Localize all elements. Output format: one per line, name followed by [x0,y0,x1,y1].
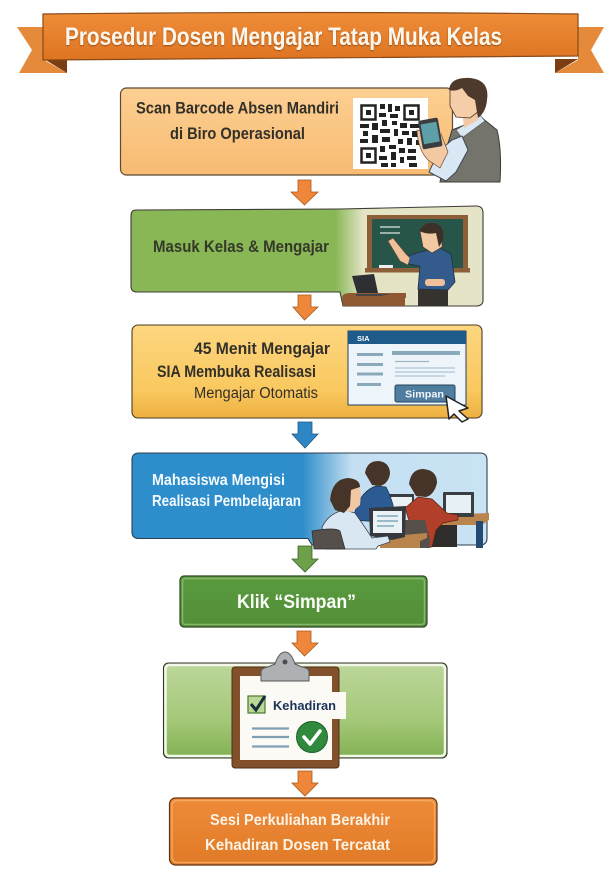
panel background [132,453,487,545]
button text: Klik “Simpan” [237,592,356,613]
right laptop [443,492,474,517]
SIA window: SIA [357,334,370,343]
panel bevel [166,665,445,756]
step 3 text [157,340,331,402]
step 7 text: Kehadiran Dosen Tercatat [205,837,390,854]
step 4 text: Mahasiswa Mengisi [152,472,285,489]
icon: clipboard [232,652,346,768]
neck [462,110,478,128]
icon: mouse cursor [446,396,468,422]
panel background [170,798,437,865]
shirt [408,248,455,290]
arrow 6 [292,771,318,796]
SIA window: Simpan [405,388,444,400]
panel background [164,663,447,758]
right student body [405,497,458,547]
panel background [120,88,452,175]
step 3 text: 45 Menit Mengajar [194,340,331,358]
arrow 3 [292,422,318,448]
Simpan button [395,385,455,402]
collar [456,115,485,138]
middle student head [365,461,390,486]
middle student body [353,486,394,522]
vest [440,118,501,182]
green check badge [296,722,328,752]
window header [348,331,466,344]
step 1 text: di Biro Operasional [170,125,305,143]
right student trousers [430,525,457,547]
right ribbon tail [555,27,604,73]
trousers [418,287,448,306]
right student head [409,469,437,497]
button bevel [182,578,424,624]
panel background [132,325,482,418]
near student hair [330,478,360,513]
laptop [352,274,391,296]
step 4 text: Realisasi Pembelajaran [152,493,301,510]
window content lines [357,354,383,384]
banner body [43,12,578,60]
hair [449,78,487,118]
title banner [17,12,604,73]
SIA window [348,331,466,405]
hair [419,223,443,247]
step 3: 45 minute panel [132,325,482,422]
icon: students at laptops [312,461,489,549]
desk [342,293,406,306]
forearm [425,279,445,286]
checkbox [248,696,265,713]
chalkboard [365,215,470,272]
panel bevel [172,800,434,862]
clipboard paper [240,676,332,760]
clipboard board [232,667,339,768]
near chair [312,529,345,549]
step 4 text [152,472,301,510]
step 6: attendance panel [164,652,447,768]
step 1 text: Scan Barcode Absen Mandiri [136,100,339,118]
icon: man scanning with phone [417,78,501,182]
button background [180,576,427,627]
pointing arm [388,238,410,265]
metal clip [261,652,309,681]
kehadiran label: Kehadiran [273,698,336,713]
arrow 1 [291,180,318,205]
panel background [131,206,483,306]
QR code [353,98,428,169]
face [450,85,483,118]
step 2 text: Masuk Kelas & Mengajar [153,238,330,256]
right desk [438,513,489,525]
phone [418,117,443,149]
list lines [252,728,289,746]
step 3 text: SIA Membuka Realisasi [157,363,316,381]
head [420,229,442,253]
kehadiran tab [320,692,346,719]
title text: Prosedur Dosen Mengajar Tatap Muka Kelas [65,23,502,51]
right ribbon fold [555,59,578,73]
chair [405,520,430,548]
near laptop [369,506,406,540]
arrow 2 [293,295,318,320]
arrow 4 [292,546,318,572]
step 5: klik simpan button [180,576,427,627]
step 1: scan barcode panel [120,78,501,182]
left ribbon fold [44,59,67,73]
sleeve [429,136,468,181]
near student head [330,479,361,512]
step 1 text [136,100,339,143]
near desk [380,533,427,548]
middle laptop [388,494,414,511]
step 7: session end panel [170,798,437,865]
step 7 text [205,812,390,854]
hand [417,130,448,168]
arrow 5 [292,631,318,656]
step 4: student panel [132,453,489,549]
step 3 text: Mengajar Otomatis [194,385,318,402]
step 7 text: Sesi Perkuliahan Berakhir [210,812,390,829]
icon: lecturer teaching [388,223,455,306]
step 2: enter class panel [131,206,483,306]
left ribbon tail [17,27,67,73]
near student body [322,510,390,549]
